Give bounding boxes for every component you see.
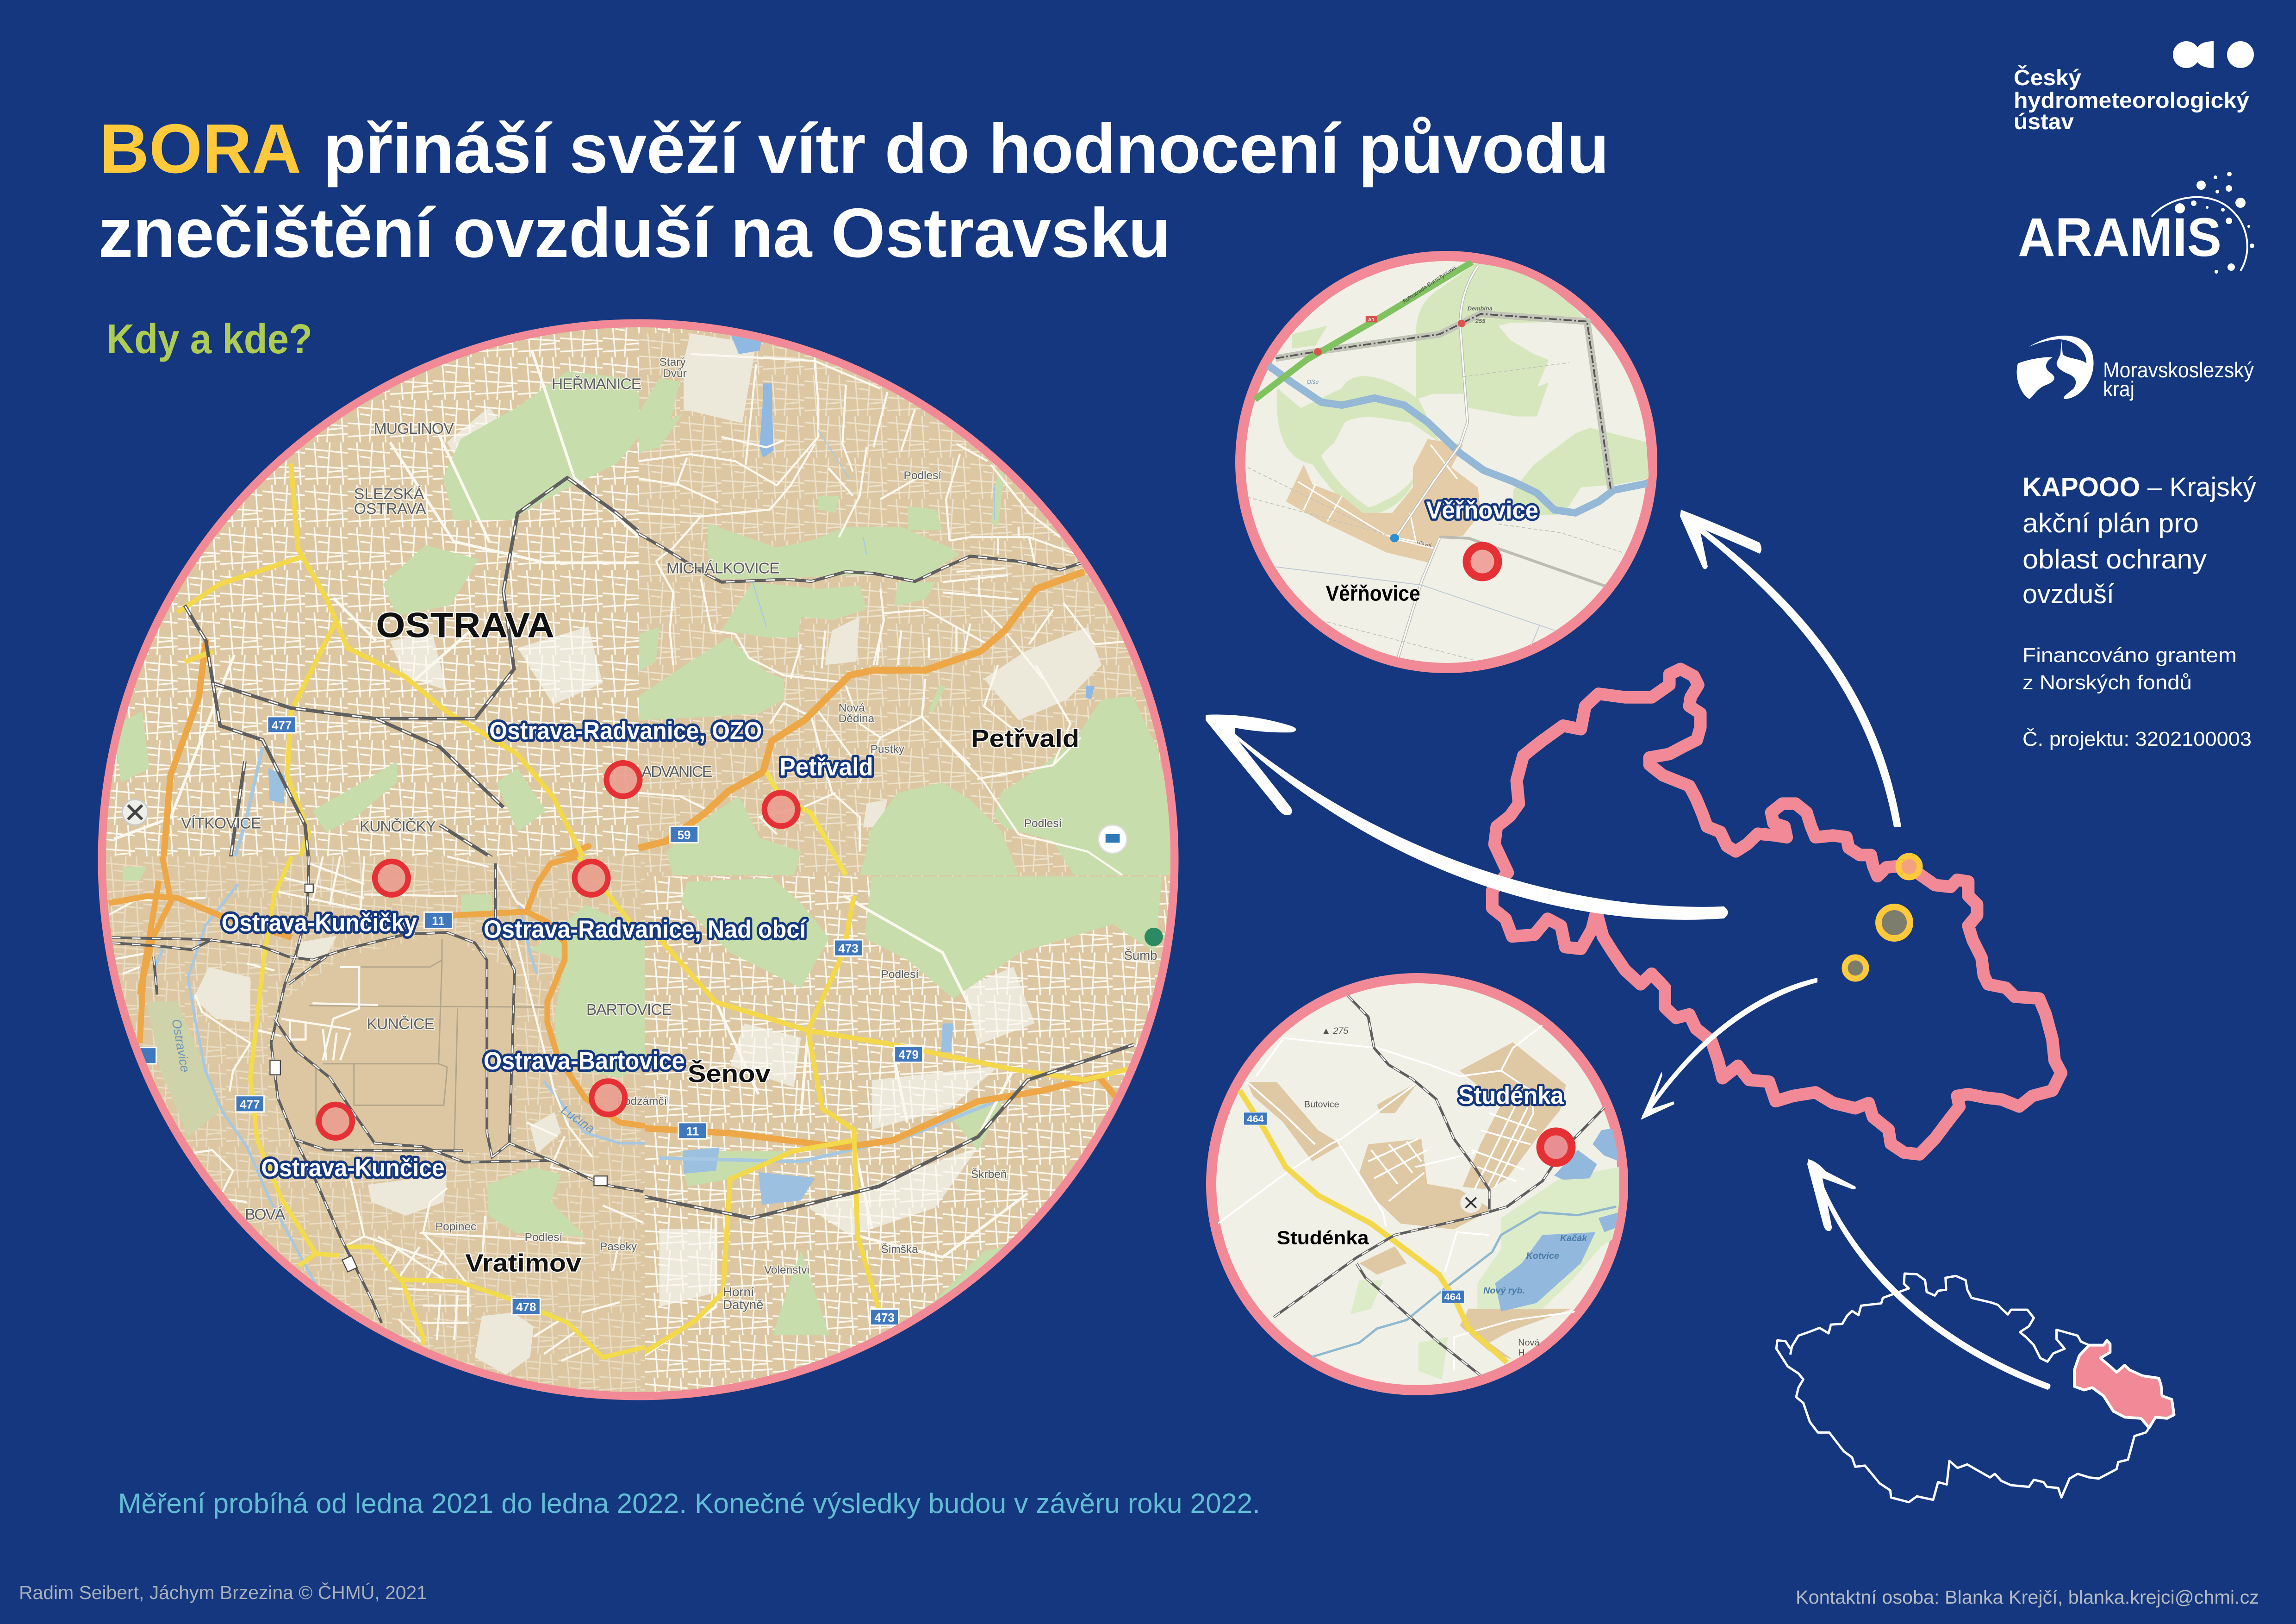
ponds [1495, 1127, 1619, 1312]
place names: KUNČICE [367, 1015, 435, 1033]
railways [112, 856, 643, 1323]
rivers [154, 884, 645, 1285]
text block: KAPOOO project: akční plán pro [2022, 508, 2199, 538]
logo: ARAMIS: ARAMIS [2018, 207, 2221, 268]
road number shields: 11 [432, 914, 445, 928]
logo: Czech Hydrometeorological Institute: Český [2014, 65, 2081, 90]
logo: Czech Hydrometeorological Institute: hydrometeorologický [2014, 88, 2249, 113]
map labels layer: Pustky [871, 743, 905, 756]
streets [639, 333, 1132, 875]
station marker: Ostrava-Bartovice [591, 1081, 625, 1114]
logo: Moravian-Silesian Region [2017, 336, 2254, 401]
map labels layer: Podlesí [881, 968, 919, 981]
green land [1277, 263, 1649, 516]
orange motorways [160, 641, 1120, 1147]
town names: OSTRAVA [376, 606, 554, 645]
small map text: 255 [1475, 318, 1486, 324]
logo: Czech Hydrometeorological Institute [2014, 41, 2254, 134]
road number shields [135, 717, 923, 1325]
arrow: from Czech map to region map [1807, 1159, 2050, 1390]
street grid [1218, 1025, 1578, 1371]
subheading: when and where: Kdy a kde? [106, 316, 312, 362]
Kunčice works lines [309, 939, 544, 1154]
green areas [114, 371, 1162, 1335]
village [1286, 439, 1481, 562]
railway [639, 534, 1081, 582]
town names: Šenov [688, 1060, 771, 1088]
built-up areas [1247, 1042, 1572, 1360]
town names [376, 606, 1079, 1277]
region marker: Ostrava [1879, 907, 1910, 938]
small map text: Dembina [1468, 306, 1493, 312]
map labels layer: Šimška [881, 1243, 918, 1256]
place names: BARTOVICE [586, 1001, 672, 1018]
map labels layer [122, 356, 1163, 1325]
map pins [122, 800, 1163, 946]
map labels layer: Paseky [600, 1240, 637, 1253]
panel: Věřňovice map [1240, 256, 1652, 668]
railways [1274, 995, 1605, 1375]
off-white open land [390, 336, 1035, 1307]
rivers [227, 747, 1014, 1162]
place names: MICHÁLKOVICE [666, 560, 780, 577]
title: BORA [100, 109, 301, 187]
place names: HEŘMANICE [552, 376, 641, 393]
logo: Moravian-Silesian Region: Moravskoslezský [2103, 358, 2254, 382]
panel: main map of Ostrava [93, 315, 1203, 1426]
place names [181, 376, 780, 1224]
station label: Petřvald: Petřvald [780, 754, 873, 781]
text block: funding: z Norských fondů [2022, 671, 2192, 694]
road number shields: 473 [875, 1311, 895, 1324]
map labels layer: Dvůr [663, 368, 687, 380]
station label: Věřňovice: Věřňovice [1426, 497, 1538, 524]
logo: Moravian-Silesian Region: kraj [2103, 377, 2134, 401]
river Olše [1268, 365, 1649, 513]
map labels layer: Podlesí [1024, 818, 1062, 830]
station label: Ostrava-Kunčice: Ostrava-Kunčice [261, 1155, 445, 1182]
map labels layer: Škrbeň [971, 1168, 1007, 1181]
map layer: north-east quadrant [639, 333, 1181, 876]
place names: ADVANICE [641, 763, 712, 781]
arrow: to Studénka map [1641, 978, 1817, 1120]
green areas [123, 867, 645, 1237]
label: black place name: Studénka [1277, 1227, 1369, 1248]
orange motorways [109, 856, 645, 1126]
river banks [147, 1001, 219, 1137]
small map text: Kačák [1560, 1234, 1587, 1243]
station label: Ostrava-Radvanice, Nad obcí: Ostrava-Radvanice, Nad obcí [484, 916, 807, 943]
map layer: south-west quadrant [102, 856, 645, 1399]
ponds [730, 333, 1095, 700]
station marker: Věřňovice [1467, 546, 1498, 577]
streams [753, 430, 995, 627]
small map text: Butovice [1304, 1100, 1339, 1110]
region marker: Studénka [1845, 957, 1866, 979]
region marker: Věřňovice [1898, 856, 1920, 877]
footer: contact: Kontaktní osoba: Blanka Krejčí, blanka.krejci@chmi.cz [1796, 1587, 2259, 1608]
map labels layer: Podlesí [904, 469, 941, 482]
road number shields: 478 [516, 1300, 536, 1314]
station icons [270, 884, 607, 1272]
station marker: Studénka [1540, 1131, 1572, 1163]
map labels layer: Šumb [1124, 948, 1157, 962]
text block: funding [2022, 644, 2252, 750]
region highlighted in Czech map [2074, 1340, 2174, 1428]
motorway [639, 572, 1084, 848]
road number shields [1244, 1112, 1464, 1303]
map layer: overview streets, fields and roads [93, 315, 1203, 1426]
boundary band [1276, 314, 1611, 489]
text block: KAPOOO project: KAPOOO – Krajský [2022, 472, 2256, 502]
yellow road [766, 772, 846, 875]
road number shields: 473 [838, 942, 859, 956]
text block: funding: Financováno grantem [2022, 644, 2237, 667]
station label: Ostrava-Radvanice, OZO: Ostrava-Radvanice, OZO [489, 718, 762, 745]
roads [1395, 266, 1605, 657]
map labels layer: Starý [659, 356, 686, 369]
logo: ARAMIS [2018, 172, 2254, 274]
text block: funding: Č. projektu: 3202100003 [2022, 727, 2252, 750]
steelworks plain [271, 932, 516, 1154]
map: Moravian-Silesian region outline [1492, 669, 2061, 1155]
label: black place name: Věřňovice [1326, 581, 1420, 606]
road number shields: 477 [272, 718, 292, 732]
station label: Studénka: Studénka [1458, 1082, 1564, 1109]
arrow: to main Ostrava map [1206, 715, 1728, 920]
small map text: Kotvice [1526, 1251, 1559, 1261]
map labels layer: Horní [723, 1285, 754, 1299]
title: znečištění ovzduší na Ostravsku [98, 194, 1171, 272]
place names: KUNČIČKY [360, 818, 436, 835]
station marker: Ostrava-Kunčičky [375, 862, 408, 895]
station label: Ostrava-Bartovice: Ostrava-Bartovice [484, 1048, 685, 1075]
road number shields: 477 [240, 1097, 260, 1111]
open land [193, 936, 561, 1374]
river [1312, 1206, 1616, 1357]
map labels layer: Ostravice [169, 1018, 193, 1074]
footer: authors: Radim Seibert, Jáchym Brzezina © ČHMÚ, 2021 [19, 1582, 427, 1603]
road number shields: 11 [686, 1124, 699, 1138]
panel: Věřňovice map: A1 [1368, 317, 1375, 323]
station label: Ostrava-Kunčičky: Ostrava-Kunčičky [222, 910, 417, 937]
map: Czech Republic outline [1776, 1274, 2174, 1502]
small map text: H [1518, 1348, 1525, 1358]
map labels layer: Dědina [839, 712, 875, 725]
small map text: Olše [1307, 379, 1319, 385]
open land [684, 333, 1101, 827]
water [268, 768, 953, 1205]
text block: KAPOOO project: ovzduší [2022, 579, 2114, 609]
streets [102, 856, 643, 1361]
measurement period note: Měření probíhá od ledna 2021 do ledna 2022. Konečné výsledky budou v závěru roku 2022. [118, 1488, 1260, 1519]
map labels layer: Popinec [436, 1221, 476, 1233]
railways [185, 478, 1134, 1218]
field lines [1248, 362, 1623, 660]
place names: VÍTKOVICE [181, 815, 261, 832]
map labels layer: Volenstvi [764, 1264, 809, 1276]
small map text: Nový ryb. [1483, 1286, 1525, 1296]
restaurant pin [1460, 1193, 1481, 1213]
small map text: ▲ 275 [1322, 1026, 1349, 1036]
text block: KAPOOO project: oblast ochrany [2022, 544, 2207, 575]
title [98, 109, 1609, 272]
panel: Věřňovice map: Autostrada Bursztynowa [1401, 264, 1457, 305]
small map text: Nová [1518, 1338, 1540, 1348]
text block: KAPOOO project [2022, 472, 2256, 609]
place names: OSTRAVA [354, 500, 426, 518]
station marker: Petřvald [765, 793, 798, 826]
title: přináší svěží vítr do hodnocení původu [323, 109, 1609, 187]
green areas [639, 378, 1172, 875]
small map text [1304, 1026, 1587, 1358]
yellow roads [250, 856, 645, 1357]
place names: MUGLINOV [374, 420, 454, 437]
place names: BOVÁ [245, 1206, 286, 1224]
map labels layer: Podzámčí [617, 1095, 667, 1108]
street network [93, 315, 1203, 1426]
map labels layer: Podlesí [525, 1231, 562, 1243]
small map text [1307, 306, 1493, 549]
town names: Petřvald [971, 725, 1079, 753]
road number shields: 464 [1247, 1113, 1264, 1124]
white main streets [114, 350, 1027, 1360]
road number shields: 464 [1444, 1292, 1461, 1302]
road 464 [1240, 1090, 1507, 1362]
station marker: Ostrava-Radvanice, OZO [606, 763, 640, 796]
station marker: Ostrava-Radvanice, Nad obcí [575, 862, 608, 895]
map labels layer: Nová [839, 702, 865, 714]
motorway A1 [1255, 262, 1472, 400]
map labels layer: Lučina [559, 1102, 597, 1136]
place names: SLEZSKÁ [354, 486, 424, 503]
open land inside river bend [1327, 417, 1419, 504]
arrow: to Věřňovice map [1680, 510, 1901, 827]
logo: Czech Hydrometeorological Institute: ústav [2014, 110, 2074, 134]
station marker: Ostrava-Kunčice [319, 1105, 352, 1138]
yellow roads [178, 463, 1141, 1356]
small map text: Hlavní [1416, 539, 1432, 549]
road number shields: 479 [899, 1048, 919, 1062]
road number shields: 59 [678, 828, 691, 842]
town names: Vratimov [465, 1249, 581, 1277]
panel: Studénka map [1211, 978, 1623, 1390]
green land [1350, 1167, 1619, 1380]
map labels layer: Datyně [723, 1297, 764, 1312]
